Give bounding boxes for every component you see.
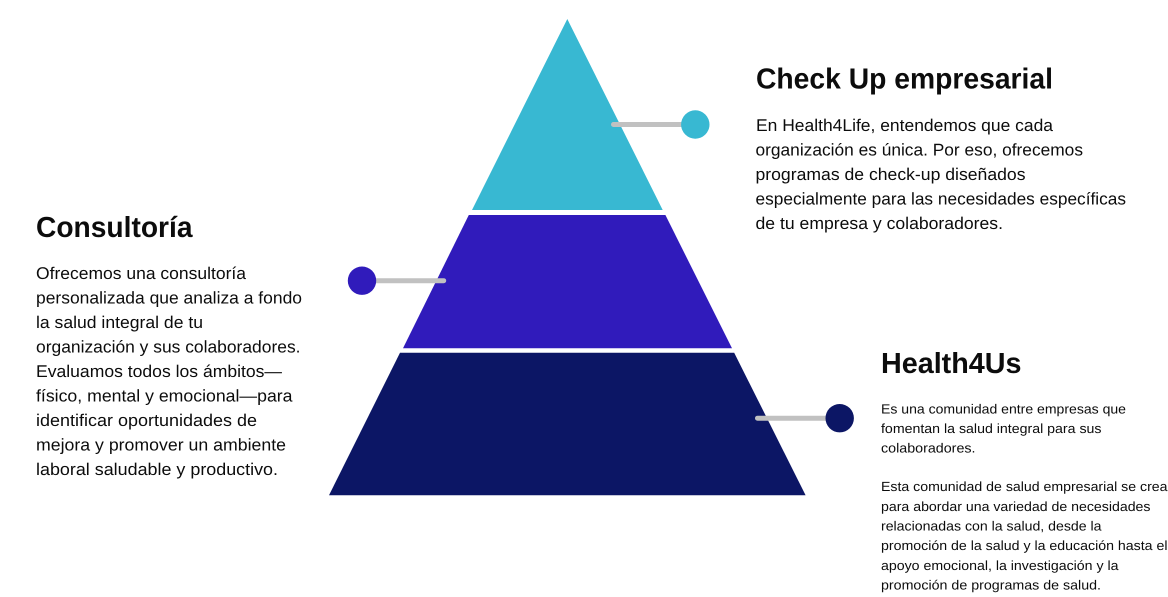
text block: Consultoría description: organización y sus colaboradores.: [36, 338, 300, 356]
connector: Health4Us marker: [758, 404, 854, 432]
text block: Health4Us intro: [881, 402, 1126, 456]
text block: Check Up description: En Health4Life, entendemos que cada: [756, 116, 1054, 135]
connector: Check Up marker: [614, 110, 710, 139]
panel: Check Up empresarial: [756, 64, 1126, 233]
text block: Consultoría description: [36, 264, 302, 479]
text block: Health4Us details: relacionadas con la salud, desde la: [881, 518, 1102, 534]
text block: Health4Us details: Esta comunidad de salud empresarial se crea: [881, 479, 1168, 494]
text block: Check Up description: [756, 116, 1126, 233]
text block: Consultoría description: Evaluamos todos los ámbitos—: [36, 362, 282, 381]
text block: Consultoría description: mejora y promover un ambiente: [36, 436, 286, 454]
pyramid chart: [329, 19, 806, 495]
text block: Check Up description: organización es única. Por eso, ofrecemos: [756, 140, 1083, 160]
text block: Health4Us details: para abordar una variedad de necesidades: [881, 499, 1151, 514]
text block: Consultoría description: laboral saludable y productivo.: [36, 460, 278, 479]
text block: Health4Us details: promoción de la salud y la educación hasta el: [881, 538, 1168, 553]
text block: Check Up description: de tu empresa y colaboradores.: [756, 214, 1003, 233]
text block: Health4Us intro: colaboradores.: [881, 440, 976, 456]
text block: Health4Us details: apoyo emocional, la investigación y la: [881, 558, 1119, 573]
pyramid tier: middle indigo: [403, 215, 732, 348]
pyramid tier: bottom navy: [329, 353, 806, 495]
text block: Consultoría description: identificar oportunidades de: [36, 411, 257, 430]
text block: Consultoría description: físico, mental y emocional—para: [36, 386, 293, 406]
text block: Health4Us intro: Es una comunidad entre empresas que: [881, 402, 1126, 416]
heading: Check Up empresarial: Check Up empresarial: [756, 64, 1053, 96]
text block: Health4Us details: promoción de programas de salud.: [881, 578, 1101, 592]
text block: Health4Us intro: fomentan la salud integral para sus: [881, 421, 1102, 436]
heading: Consultoría: Consultoría: [36, 212, 193, 244]
text block: Consultoría description: la salud integral de tu: [36, 313, 203, 332]
text block: Consultoría description: personalizada que analiza a fondo: [36, 288, 302, 308]
text block: Check Up description: programas de check-up diseñados: [756, 165, 1026, 184]
panel: Health4Us: [881, 348, 1168, 592]
text block: Health4Us details: [881, 479, 1168, 592]
connector: Consultoría marker: [348, 266, 444, 295]
text block: Consultoría description: Ofrecemos una consultoría: [36, 264, 247, 283]
pyramid tier: top teal: [472, 19, 663, 210]
heading: Health4Us: Health4Us: [881, 348, 1022, 380]
panel: Consultoría: [36, 212, 302, 479]
text block: Check Up description: especialmente para las necesidades específicas: [756, 190, 1126, 208]
